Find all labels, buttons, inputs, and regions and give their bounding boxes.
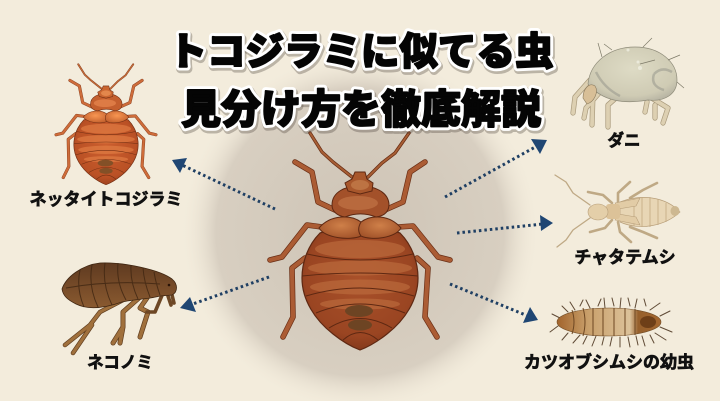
label: カツオブシムシの幼虫: カツオブシムシの幼虫 (524, 352, 694, 372)
arrow: to dust mite (445, 139, 547, 197)
title: トコジラミに似てる虫 (169, 33, 555, 76)
central shaded halo (180, 52, 540, 401)
label: ネコノミ: ネコノミ (87, 353, 153, 372)
icon: carpet beetle larva (550, 298, 672, 347)
title: 見分け方を徹底解説 (181, 88, 541, 132)
icon: dust mite (573, 38, 684, 127)
title: トコジラミに似てる虫 (168, 31, 554, 74)
icon: tropical bed bug (56, 64, 156, 185)
title: 見分け方を徹底解説 (181, 88, 541, 132)
label: ネッタイトコジラミ: ネッタイトコジラミ (30, 190, 182, 209)
arrow: to carpet beetle larva (450, 284, 538, 323)
arrow: to booklouse (457, 215, 553, 233)
label: ダニ: ダニ (608, 130, 640, 150)
icon: cat flea (62, 263, 176, 353)
label: チャタテムシ: チャタテムシ (574, 248, 676, 267)
title (168, 31, 555, 134)
arrow: to tropical bed bug (172, 158, 275, 209)
arrow: to cat flea (180, 277, 269, 312)
icon: booklouse (555, 175, 680, 247)
title: トコジラミに似てる虫 (168, 31, 554, 74)
icon: central bed bug (トコジラミ) (270, 133, 450, 350)
title: 見分け方を徹底解説 (182, 90, 542, 134)
